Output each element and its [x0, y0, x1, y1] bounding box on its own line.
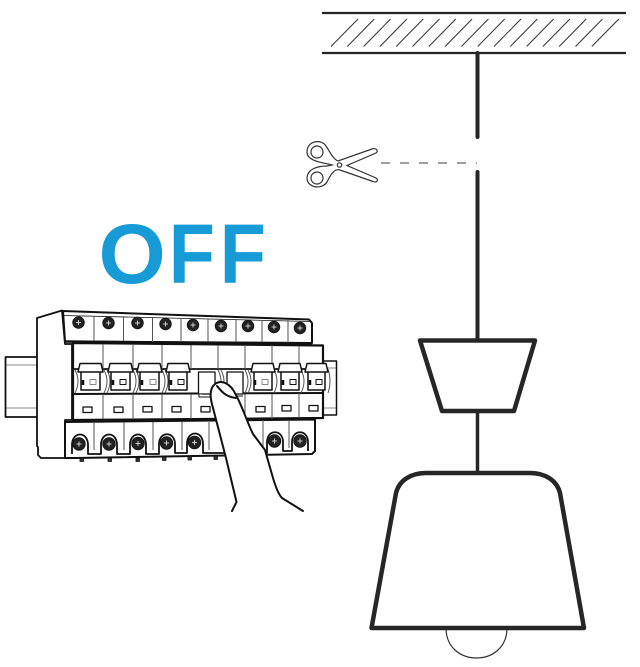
arcs between toggles	[75, 369, 330, 393]
fingernail	[217, 386, 236, 398]
icon: scissors	[307, 142, 377, 187]
lamp holder	[420, 340, 535, 411]
module indicators	[83, 406, 318, 412]
housing body	[37, 310, 72, 458]
ceiling with hatching	[322, 13, 626, 53]
toggle windows	[83, 380, 322, 385]
upper terminal strip	[63, 311, 312, 344]
circuit breaker panel	[6, 310, 336, 462]
toggle switches	[78, 364, 328, 397]
lamp shade	[372, 473, 584, 628]
lower terminal strip	[65, 420, 315, 462]
OFF heading: F	[169, 207, 215, 301]
finger pressing switch	[211, 382, 303, 540]
OFF heading: F	[220, 207, 266, 301]
light bulb	[446, 628, 507, 658]
lower cable	[476, 172, 480, 340]
lamp stem	[476, 411, 479, 473]
lower screw saddles	[72, 432, 308, 454]
breaker module band	[73, 343, 330, 420]
OFF heading: O	[98, 208, 166, 302]
upper cable	[476, 53, 480, 137]
right rail clip	[323, 361, 336, 415]
cut line	[381, 162, 477, 164]
left rail clip	[6, 357, 38, 417]
bottom pins	[80, 456, 218, 462]
lower screws	[73, 435, 306, 450]
OFF heading	[98, 207, 266, 302]
upper screws	[73, 317, 306, 334]
